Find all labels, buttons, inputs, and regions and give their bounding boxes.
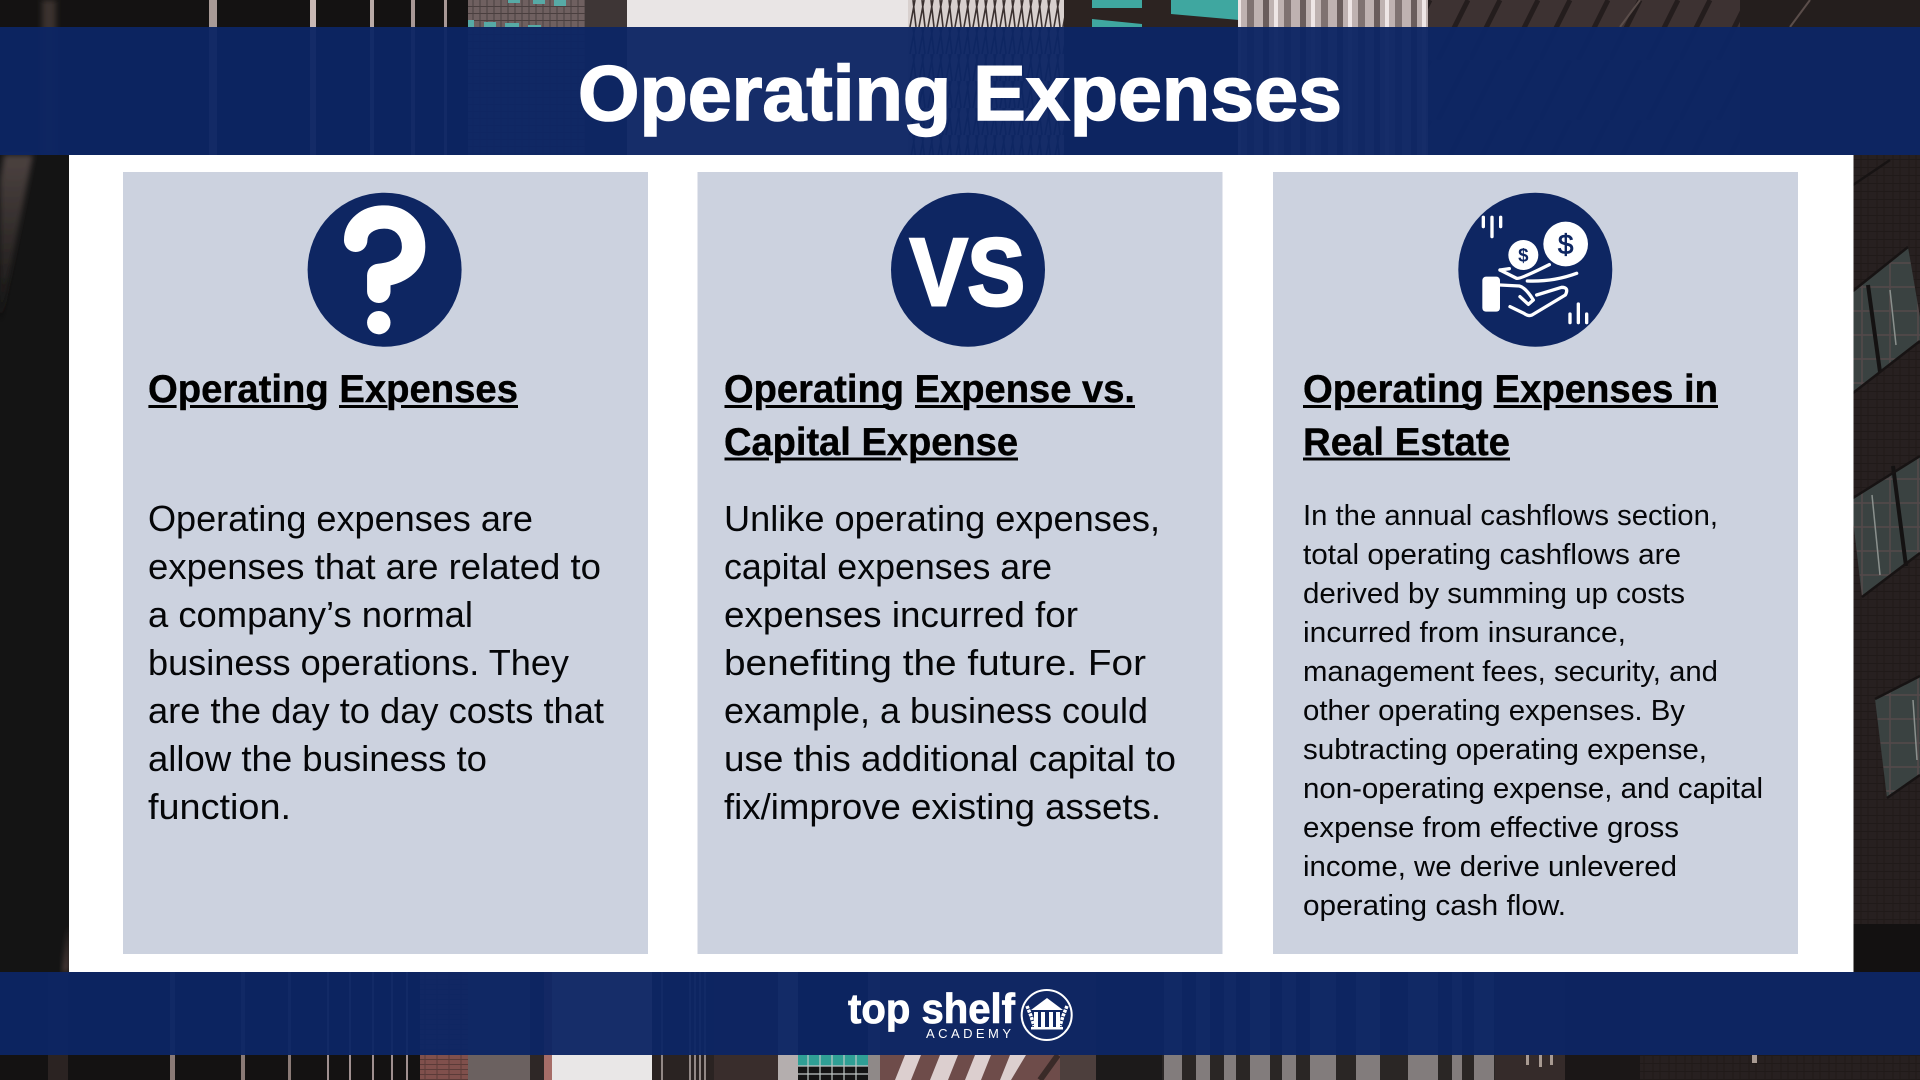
body text: real estate cash flows xyxy=(1303,500,1763,922)
heading: expense vs capital: Capital Expense xyxy=(724,421,1018,464)
title text: Operating Expenses xyxy=(578,49,1342,137)
heading: expense vs capital: Operating Expense vs. xyxy=(724,368,1135,411)
icon: academy building seal xyxy=(1022,990,1072,1040)
logo: top shelf academy xyxy=(848,985,1072,1041)
icon: hand with coins: $ xyxy=(1558,229,1574,260)
body text: real estate cash flows: incurred from insurance, xyxy=(1303,617,1626,649)
heading: real estate: Real Estate xyxy=(1303,421,1510,464)
icon: hand with coins xyxy=(1458,193,1612,347)
heading: expense vs capital xyxy=(724,368,1135,464)
body text: definition: a company’s normal xyxy=(148,594,473,635)
body text: definition: allow the business to xyxy=(148,738,487,779)
body text: real estate cash flows: total operating cashflows are xyxy=(1303,539,1681,571)
heading: operating expenses: Operating Expenses xyxy=(148,368,518,411)
body text: real estate cash flows: operating cash flow. xyxy=(1303,890,1566,922)
icon: VS xyxy=(891,193,1045,347)
panel: operating expense vs capital expense xyxy=(698,172,1222,954)
title banner xyxy=(0,27,1920,155)
body text: comparison: benefiting the future. For xyxy=(724,642,1146,683)
icon: hand with coins: $ xyxy=(1518,245,1529,266)
body text: real estate cash flows: expense from effective gross xyxy=(1303,812,1679,844)
body text: real estate cash flows: In the annual cashflows section, xyxy=(1303,500,1718,532)
body text: real estate cash flows: subtracting operating expense, xyxy=(1303,734,1707,766)
logo: top shelf academy: ACADEMY xyxy=(926,1026,1011,1041)
body text: real estate cash flows: management fees, security, and xyxy=(1303,656,1718,688)
body text: real estate cash flows: income, we derive unlevered xyxy=(1303,851,1677,883)
body text: comparison xyxy=(724,498,1176,827)
icon: question mark xyxy=(308,193,462,347)
body text: real estate cash flows: derived by summing up costs xyxy=(1303,578,1685,610)
body text: comparison: use this additional capital to xyxy=(724,738,1176,779)
body text: definition xyxy=(148,498,604,827)
logo: top shelf academy: top shelf xyxy=(848,985,1016,1032)
body text: comparison: fix/improve existing assets. xyxy=(724,786,1161,827)
body text: definition: Operating expenses are xyxy=(148,498,533,539)
heading: real estate xyxy=(1303,368,1718,464)
body text: definition: expenses that are related to xyxy=(148,546,601,587)
panel: operating expenses in real estate xyxy=(1273,172,1798,954)
icon: VS: VS xyxy=(910,219,1025,326)
body text: definition: are the day to day costs that xyxy=(148,690,604,731)
footer banner xyxy=(0,972,1920,1055)
body text: comparison: expenses incurred for xyxy=(724,594,1078,635)
heading: real estate: Operating Expenses in xyxy=(1303,368,1718,411)
body text: definition: business operations. They xyxy=(148,642,569,683)
body text: comparison: example, a business could xyxy=(724,690,1148,731)
body text: comparison: Unlike operating expenses, xyxy=(724,498,1160,539)
panel: operating expenses xyxy=(123,172,648,954)
white content board xyxy=(69,155,1854,972)
body text: real estate cash flows: non-operating expense, and capital xyxy=(1303,773,1763,805)
body text: real estate cash flows: other operating expenses. By xyxy=(1303,695,1685,727)
body text: comparison: capital expenses are xyxy=(724,546,1052,587)
body text: definition: function. xyxy=(148,786,291,827)
